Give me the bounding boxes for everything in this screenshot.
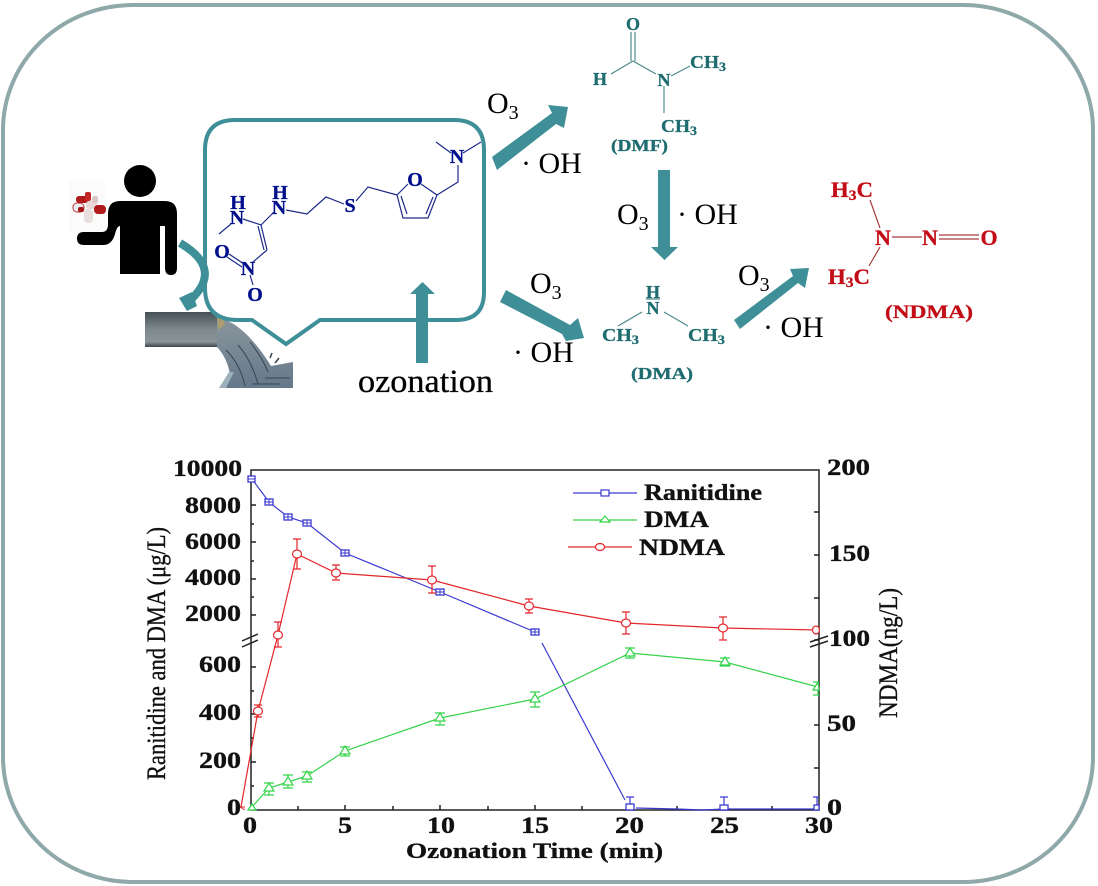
left axis tick labels: 600	[199, 652, 241, 677]
left axis tick labels: 0	[227, 795, 241, 820]
x axis tick labels: 10	[427, 813, 455, 838]
NDMA structure: 3	[846, 275, 854, 291]
legend	[568, 480, 762, 560]
icon: curved discharge arrow	[179, 243, 205, 311]
NDMA structure: H	[828, 264, 845, 289]
ranitidine structure: O	[247, 284, 263, 306]
arrow: DMF to DMA	[651, 170, 678, 260]
icon: person	[77, 165, 177, 275]
ranitidine structure: H	[230, 192, 246, 214]
left axis tick labels: 8000	[185, 493, 241, 518]
ranitidine structure	[214, 142, 481, 306]
DMF structure: O	[626, 14, 640, 34]
ranitidine structure: N	[450, 146, 465, 168]
label: OH lower: · OH	[513, 336, 574, 369]
right axis tick labels	[827, 455, 870, 820]
left axis tick labels: 200	[199, 748, 241, 773]
ranitidine structure: N	[241, 258, 256, 280]
label: O3 middle: O	[617, 198, 639, 231]
DMF structure	[593, 14, 727, 155]
NDMA structure	[828, 177, 998, 323]
arrow: DMA to NDMA	[734, 268, 809, 329]
DMA structure: CH	[688, 325, 715, 345]
label: OH middle: · OH	[677, 198, 738, 231]
DMA structure: N	[646, 298, 660, 318]
plot axes	[242, 470, 828, 810]
x axis tick labels: 5	[338, 813, 352, 838]
label: O3 upper: 3	[509, 102, 519, 124]
DMA structure: (DMA)	[631, 364, 693, 383]
icon: pills	[69, 180, 106, 232]
arrow: ranitidine to DMF	[492, 105, 568, 170]
ranitidine structure: O	[407, 169, 423, 191]
NDMA structure: N	[875, 225, 891, 250]
right axis tick labels: 100	[829, 626, 870, 651]
ranitidine structure: O	[214, 241, 230, 263]
x axis tick labels	[243, 813, 833, 838]
label: O3 upper: O	[487, 87, 509, 120]
right axis tick labels: 150	[829, 541, 870, 566]
legend: DMA	[644, 507, 709, 532]
DMF structure: 3	[690, 123, 698, 138]
DMF structure: N	[658, 70, 670, 90]
NDMA structure: (NDMA)	[885, 302, 973, 323]
series: DMA	[248, 648, 819, 810]
label: O3 right: O	[738, 259, 760, 292]
NDMA structure: O	[980, 225, 998, 250]
right axis tick labels: 200	[827, 455, 870, 480]
label: OH upper: · OH	[521, 147, 582, 180]
label: OH right: · OH	[763, 311, 824, 344]
NDMA structure: H	[831, 177, 848, 202]
DMA structure: H	[646, 282, 660, 302]
label: O3 middle: 3	[639, 213, 649, 235]
DMF structure: H	[593, 69, 607, 89]
ranitidine structure: N	[230, 207, 245, 229]
series: NDMA	[237, 539, 820, 810]
left axis tick labels: 6000	[185, 529, 241, 554]
legend: NDMA	[639, 535, 725, 560]
NDMA structure: C	[857, 177, 873, 202]
DMA structure: 3	[632, 332, 640, 347]
left axis tick labels: 4000	[185, 565, 241, 590]
left axis tick labels	[173, 456, 242, 820]
DMA structure: 3	[718, 332, 726, 347]
NDMA structure: N	[922, 225, 938, 250]
left axis tick labels: 10000	[173, 456, 242, 481]
ranitidine structure: H	[272, 182, 288, 204]
ranitidine structure: S	[344, 195, 356, 217]
label: ozonation: ozonation	[358, 364, 493, 400]
x axis tick labels: 25	[710, 813, 739, 838]
x axis title: Ozonation Time (min)	[406, 838, 663, 863]
DMA structure	[602, 282, 726, 383]
NDMA structure: C	[854, 264, 870, 289]
left axis tick labels: 2000	[185, 601, 241, 626]
right axis tick labels: 50	[827, 711, 856, 736]
x axis tick labels: 20	[615, 813, 644, 838]
x axis tick labels: 15	[521, 813, 549, 838]
DMF structure: CH	[661, 116, 688, 136]
icon: discharge pipe	[145, 312, 293, 388]
right axis title: NDMA(ng/L)	[874, 588, 903, 718]
left axis title: Ranitidine and DMA (μg/L)	[142, 527, 171, 780]
arrow: ranitidine to DMA	[500, 290, 584, 341]
ranitidine structure: N	[272, 197, 287, 219]
label: O3 right: 3	[760, 274, 770, 296]
DMF structure: 3	[719, 59, 727, 74]
speech bubble around ranitidine	[205, 120, 484, 344]
x axis tick labels: 30	[805, 813, 833, 838]
arrow: ozonation up	[410, 282, 435, 363]
label: O3 lower: 3	[552, 282, 562, 304]
series: Ranitidine	[248, 476, 819, 810]
NDMA structure: 3	[849, 188, 857, 204]
legend: Ranitidine	[644, 480, 762, 505]
DMA structure: CH	[602, 325, 629, 345]
x axis tick labels: 0	[243, 813, 257, 838]
right axis tick labels: 0	[827, 795, 842, 820]
DMF structure: CH	[690, 52, 717, 72]
line chart: concentration vs ozonation time	[142, 455, 903, 863]
label: O3 lower: O	[530, 267, 552, 300]
left axis tick labels: 400	[199, 700, 241, 725]
DMF structure: (DMF)	[611, 136, 668, 155]
